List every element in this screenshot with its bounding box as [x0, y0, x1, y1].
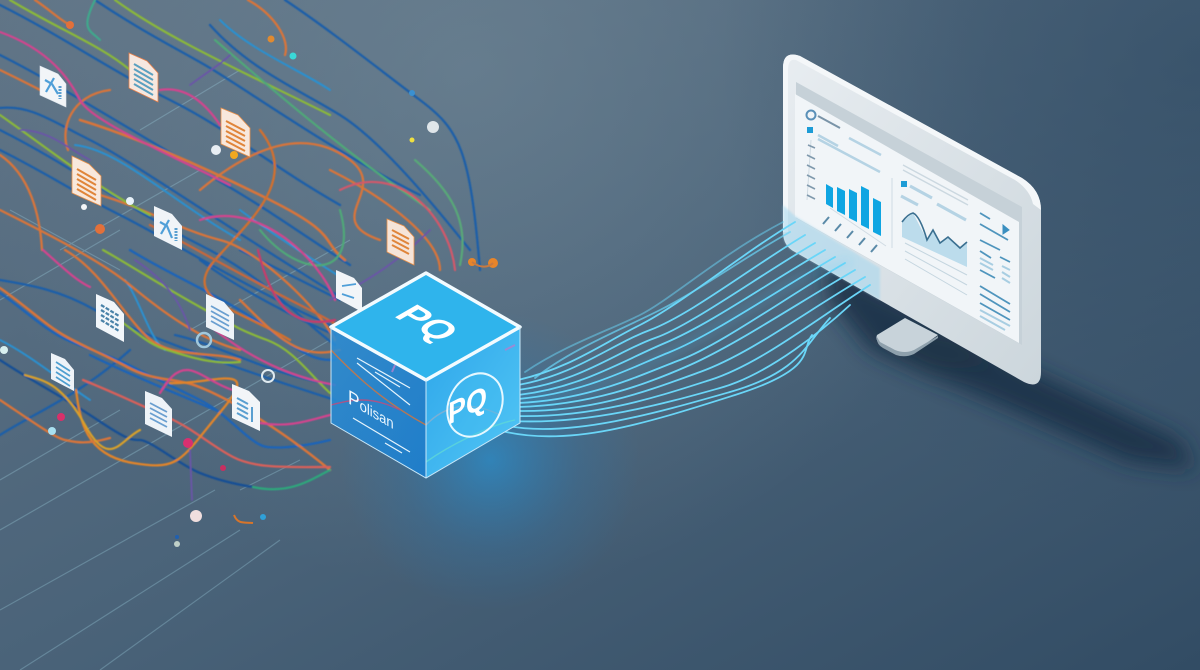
bar chart axes and labels — [807, 140, 892, 252]
top face — [331, 273, 520, 380]
top PQ: PQ — [386, 299, 469, 347]
blue lines — [0, 0, 480, 487]
document 12 — [232, 384, 260, 431]
orange lines — [0, 0, 440, 470]
label: Polisan: Polisan — [348, 386, 394, 434]
line chart — [901, 165, 968, 295]
bar chart — [826, 184, 881, 236]
tangled data lines — [0, 0, 480, 500]
document 1 — [40, 66, 66, 107]
monitor — [783, 54, 1041, 384]
pink lines — [0, 32, 455, 425]
green lines — [0, 0, 463, 489]
document 9 — [206, 294, 234, 340]
stream glow — [518, 262, 850, 400]
document 4 — [72, 156, 101, 206]
inner wires in cube — [331, 345, 515, 462]
logo and header — [806, 110, 881, 172]
monitor stand — [876, 318, 938, 356]
document 7 — [387, 219, 414, 265]
monitor shadow — [825, 260, 1195, 470]
documents — [40, 53, 414, 437]
left face lines — [353, 358, 410, 453]
scattered dots and connectors — [0, 21, 498, 547]
side PQ: PQ — [448, 379, 487, 432]
left face — [331, 327, 426, 478]
circular badge — [437, 364, 513, 446]
document 2 — [129, 53, 158, 102]
PQ cube — [331, 273, 520, 478]
document 8 — [96, 294, 124, 342]
document 6 — [336, 270, 362, 312]
document 11 — [145, 391, 172, 437]
side panel — [980, 213, 1010, 330]
purple lines — [20, 55, 430, 500]
document 5 — [154, 206, 182, 250]
data stream lines — [502, 222, 870, 436]
right face — [426, 327, 520, 478]
cube edges — [331, 327, 520, 478]
light blue lines — [0, 20, 345, 400]
monitor screen — [795, 94, 1019, 343]
document 3 — [221, 108, 250, 157]
translucent glass corner — [783, 205, 880, 300]
monitor body — [783, 54, 1041, 384]
document 10 — [51, 353, 74, 391]
